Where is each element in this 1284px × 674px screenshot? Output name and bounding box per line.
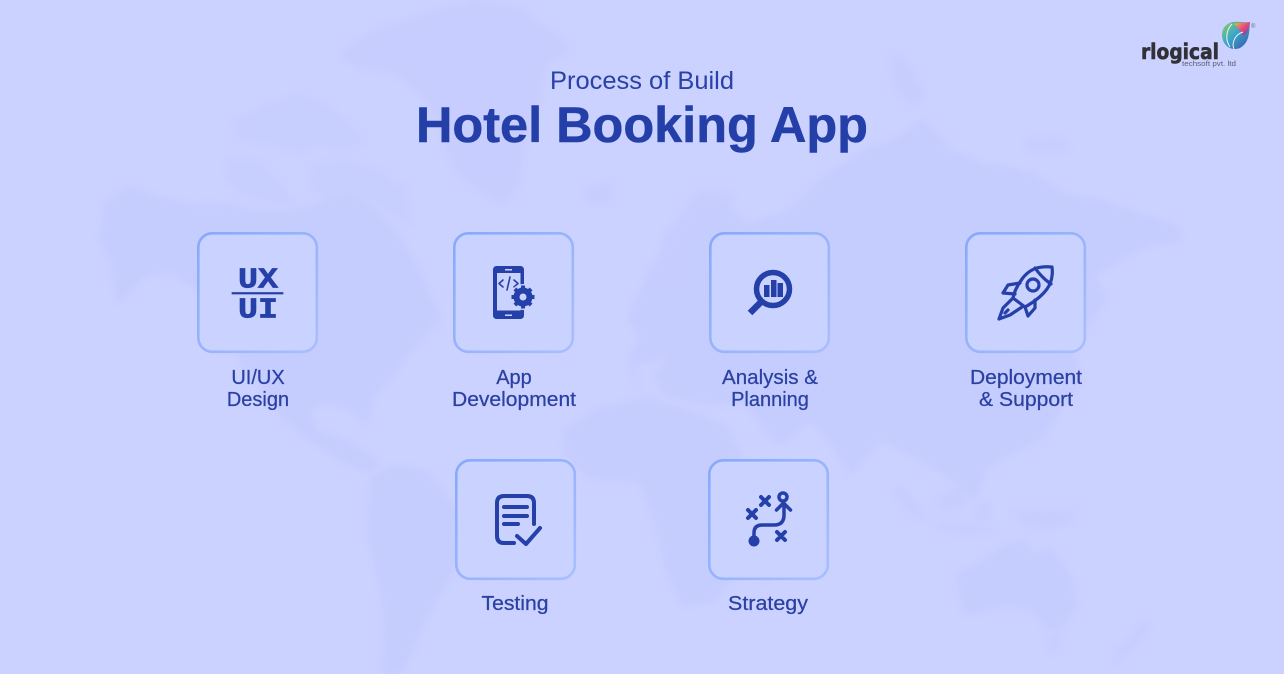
panel: UI/UX Design [198, 233, 317, 411]
title: Hotel Booking App [416, 97, 868, 153]
map: south america [367, 466, 466, 674]
icon: magnifier with bars [750, 272, 790, 313]
label: Planning [731, 389, 809, 411]
icon: play diagram with crosses [748, 493, 790, 546]
map: europe and asia [628, 120, 1182, 500]
icon: checklist document [497, 496, 540, 544]
map: tasmania [1048, 632, 1062, 655]
label: Testing [482, 593, 548, 615]
map: new zealand [1115, 622, 1150, 665]
subtitle: Process of Build [550, 67, 734, 95]
card [454, 233, 573, 352]
card [456, 460, 575, 579]
label: Design [227, 389, 289, 411]
map: svalbard and north islands [890, 55, 1070, 152]
panel: Testing [456, 460, 575, 615]
logo leaf mark [1222, 22, 1250, 49]
logo tagline: techsoft pvt. ltd [1182, 59, 1236, 68]
heading [416, 67, 868, 153]
label: Deployment [970, 367, 1082, 389]
card [710, 233, 829, 352]
panel: Analysis & Planning [710, 233, 829, 411]
panel: App Development [452, 233, 576, 411]
label: & Support [979, 389, 1073, 411]
icon: UX over UI: UI [238, 294, 278, 326]
panel: Deployment & Support [966, 233, 1085, 411]
logo: rlogical techsoft [1141, 22, 1256, 68]
label: App [496, 367, 532, 389]
map: madagascar [758, 530, 780, 582]
icon: UX over UI: UX [238, 264, 279, 296]
map: canadian arctic islands [226, 92, 410, 225]
label: Development [452, 389, 576, 411]
map: greenland [338, 0, 572, 205]
map: africa [565, 398, 782, 605]
card [198, 233, 317, 352]
map: indonesia and new guinea [895, 482, 1075, 535]
label: Analysis & [722, 367, 819, 389]
map: north america [100, 187, 440, 472]
card [966, 233, 1085, 352]
map: scandinavia and iceland [585, 182, 735, 300]
logo registered mark: ® [1251, 23, 1256, 30]
label: Strategy [728, 593, 808, 615]
icon: UX over UI [232, 264, 283, 326]
icon: rocket [999, 267, 1052, 319]
label: UI/UX [231, 367, 285, 389]
logo wordmark: rlogical [1141, 40, 1219, 64]
panel: Strategy [709, 460, 828, 615]
card [709, 460, 828, 579]
map: australia [956, 540, 1076, 630]
icon: phone with gear [493, 266, 536, 319]
